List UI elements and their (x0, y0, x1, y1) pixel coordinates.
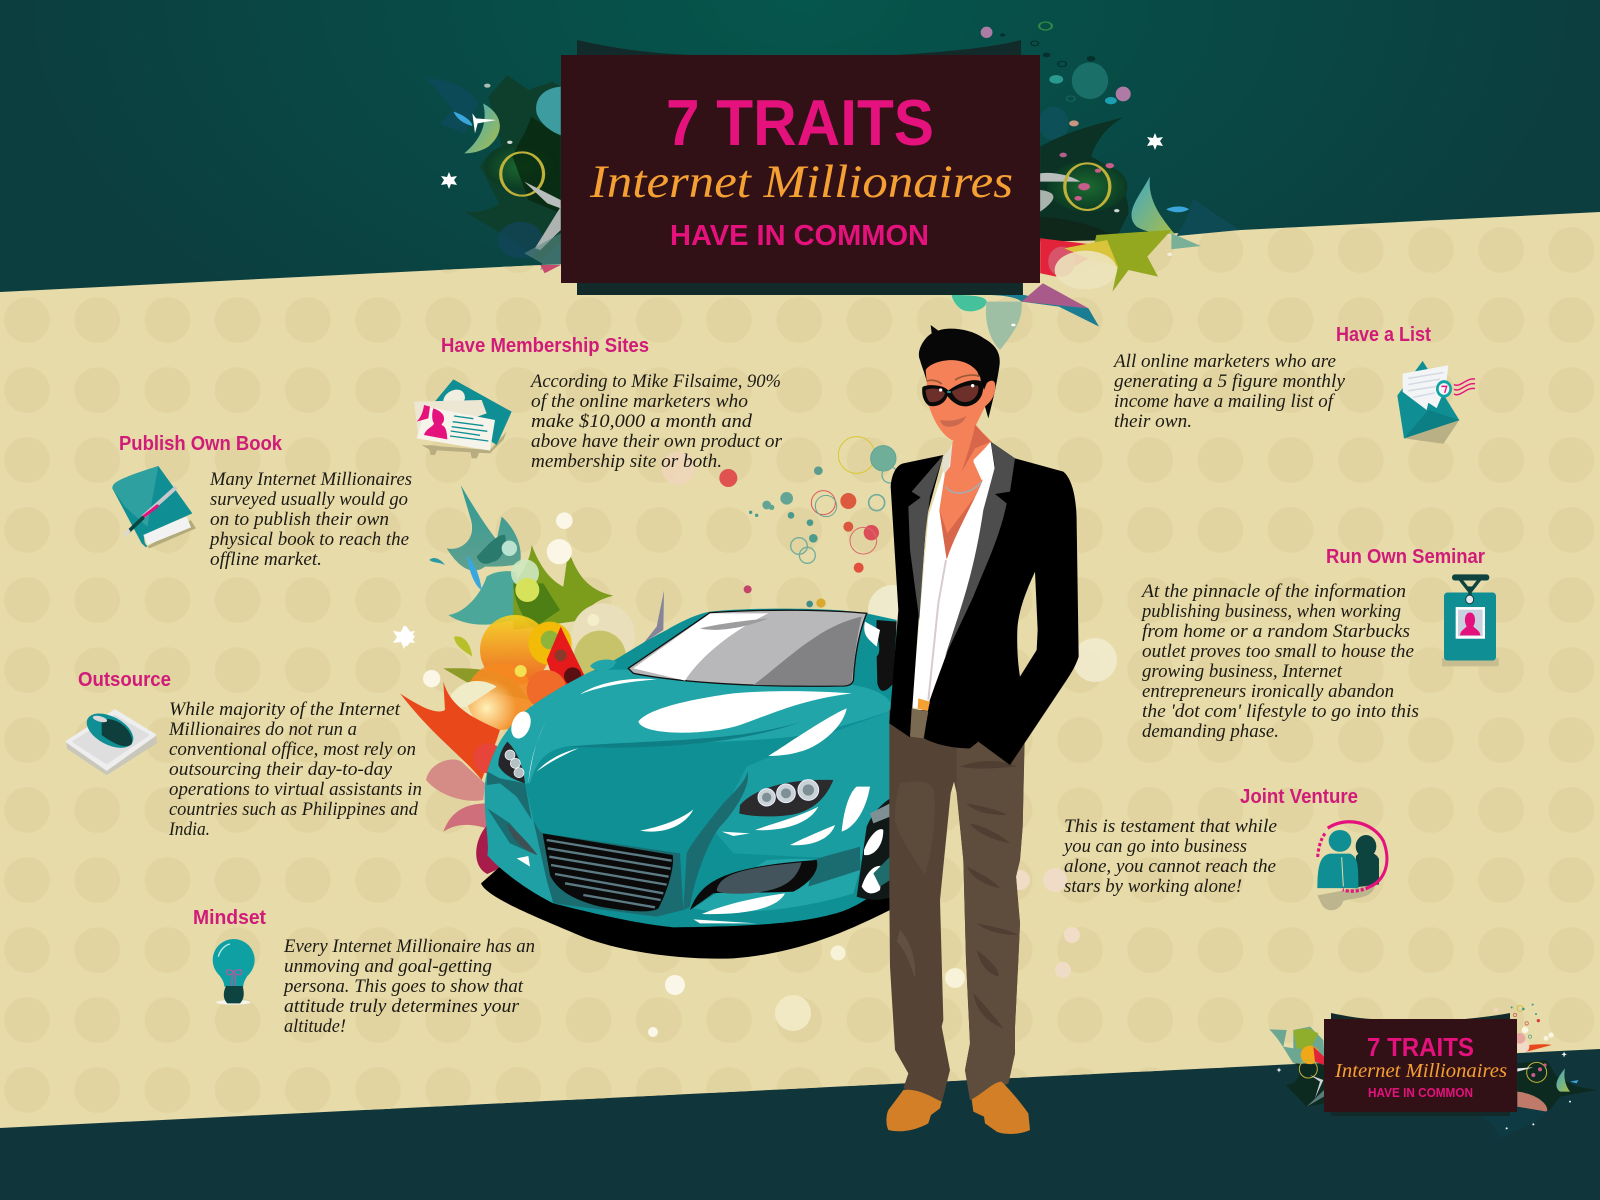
icon: id badge (1442, 574, 1499, 666)
man: face and neck (926, 360, 995, 443)
body text: growing business, Internet (1142, 662, 1343, 682)
body text: This is testament that while (1064, 817, 1277, 837)
man: trousers (889, 710, 1025, 1103)
man: right lapel (945, 442, 1015, 657)
body text: Every Internet Millionaire has an (283, 937, 535, 957)
icon: two people in ring (1317, 822, 1387, 910)
body text: make $10,000 a month and (531, 412, 753, 432)
icon: white stars (393, 133, 1163, 649)
man: mouth (940, 416, 966, 427)
car: mirror (590, 660, 617, 671)
heading: Joint Venture (1240, 786, 1358, 808)
man: belt (918, 698, 930, 711)
icon: envelope (1397, 361, 1475, 444)
car: body (485, 609, 897, 927)
body text: of the online marketers who (531, 392, 748, 412)
car: left headlight (498, 742, 525, 783)
man: chest shadow (939, 425, 991, 559)
body text: unmoving and goal-getting (284, 957, 492, 977)
decoration: right floral burst behind title (952, 22, 1240, 350)
body text: alone, you cannot reach the (1064, 857, 1276, 877)
body text: demanding phase. (1142, 722, 1279, 742)
man: jacket (889, 442, 1079, 765)
body text: countries such as Philippines and (169, 800, 419, 820)
body text: entrepreneurs ironically abandon (1142, 682, 1394, 702)
body text: conventional office, most rely on (169, 740, 416, 760)
body text: outlet proves too small to house the (1142, 642, 1414, 662)
body text: persona. This goes to show that (282, 977, 524, 997)
footer title: 7 traits: 7 TRAITS (1367, 1032, 1474, 1062)
body text: stars by working alone! (1064, 877, 1242, 897)
section: have a list (1112, 324, 1475, 444)
icon: mouse on pad (67, 706, 156, 774)
footer banner: maroon panel (1324, 1019, 1517, 1112)
man: shirt collar right (973, 442, 995, 480)
body text: generating a 5 figure monthly (1114, 372, 1346, 392)
car: air intake (690, 860, 817, 910)
heading: Mindset (193, 907, 266, 929)
body text: publishing business, when working (1140, 602, 1401, 622)
heading: Run Own Seminar (1326, 546, 1485, 568)
decoration: paint splash behind car (400, 485, 664, 874)
body text: physical book to reach the (208, 530, 409, 550)
decoration: pale bubbles (648, 585, 1117, 1037)
car illustration (481, 609, 897, 959)
body text: surveyed usually would go (210, 490, 408, 510)
man: shirt placket (928, 560, 946, 700)
footer banner: back strip (1331, 1013, 1510, 1116)
man: chest (939, 425, 992, 559)
body text: the 'dot com' lifestyle to go into this (1142, 702, 1419, 722)
body text: Millionaires do not run a (168, 720, 357, 740)
body text: Many Internet Millionaires (209, 470, 412, 490)
man: left lapel (908, 455, 943, 620)
body text: At the pinnacle of the information (1140, 582, 1406, 602)
car: left vent (507, 823, 537, 855)
body text: All online marketers who are (1112, 352, 1336, 372)
heading: Outsource (78, 669, 171, 691)
decoration: left floral burst behind title (427, 75, 561, 273)
body text: According to Mike Filsaime, 90% (529, 372, 781, 392)
heading: Have Membership Sites (441, 335, 649, 357)
banner: maroon panel (561, 55, 1040, 283)
body text: India. (168, 820, 210, 840)
section: have membership sites (414, 335, 783, 472)
heading: Have a List (1336, 324, 1431, 346)
background: beige diagonal panel with dots (0, 212, 1600, 1128)
body text (282, 937, 535, 1037)
body text: from home or a random Starbucks (1142, 622, 1410, 642)
body text (1112, 352, 1346, 432)
man: hair (919, 325, 1000, 418)
icon: light bulb (213, 939, 255, 1005)
body text (168, 700, 422, 840)
body text (1140, 582, 1419, 742)
car: white highlights (508, 622, 880, 923)
background: teal top band (0, 0, 1600, 300)
man: eyebrows (927, 375, 980, 384)
body text: their own. (1114, 412, 1192, 432)
banner: back strip (577, 40, 1023, 295)
body text: outsourcing their day-to-day (169, 760, 393, 780)
man: trouser waist (910, 708, 928, 738)
man illustration (886, 325, 1079, 1134)
body text: income have a mailing list of (1114, 392, 1336, 412)
footer title: have in common: HAVE IN COMMON (1368, 1086, 1473, 1100)
icon: book and pen (112, 466, 196, 548)
heading: Publish Own Book (119, 433, 283, 455)
small footer logo (1269, 1004, 1597, 1138)
body text: membership site or both. (531, 452, 722, 472)
car: right headlight (739, 780, 833, 816)
car: side window (876, 620, 897, 691)
body text (208, 470, 412, 570)
decoration: coloured dots and rings (662, 437, 898, 608)
man: necklace (946, 482, 982, 493)
section: publish own book (112, 433, 412, 570)
man: shirt (912, 442, 995, 710)
car: ground shadow (481, 867, 893, 959)
section: outsource (67, 669, 422, 840)
title banner (561, 40, 1040, 295)
footer title: internet millionaires: Internet Millionaires (1334, 1060, 1507, 1082)
body text: attitude truly determines your (284, 997, 520, 1017)
body text (1062, 817, 1277, 897)
decoration: footer flowers (1269, 1004, 1597, 1138)
icon: business cards (414, 379, 512, 458)
section: run own seminar (1140, 546, 1499, 742)
man: shirt collar left (942, 445, 953, 478)
section: mindset (193, 907, 535, 1037)
car: front grille (543, 833, 673, 911)
title: 7 traits: 7 TRAITS (666, 86, 934, 159)
body text: above have their own product or (531, 432, 783, 452)
title: internet millionaires: Internet Millionaires (589, 156, 1013, 208)
title: have in common: HAVE IN COMMON (670, 220, 929, 252)
man: sunglasses (922, 380, 983, 406)
body text: on to publish their own (210, 510, 389, 530)
body text: you can go into business (1062, 837, 1247, 857)
body text: altitude! (284, 1017, 346, 1037)
body text (529, 372, 783, 472)
body text: operations to virtual assistants in (169, 780, 422, 800)
body text: offline market. (210, 550, 322, 570)
man: shoes (886, 1082, 1030, 1134)
car: wheel (857, 797, 893, 900)
car: windshield (628, 610, 867, 686)
section: joint venture (1062, 786, 1387, 910)
body text: While majority of the Internet (169, 700, 401, 720)
